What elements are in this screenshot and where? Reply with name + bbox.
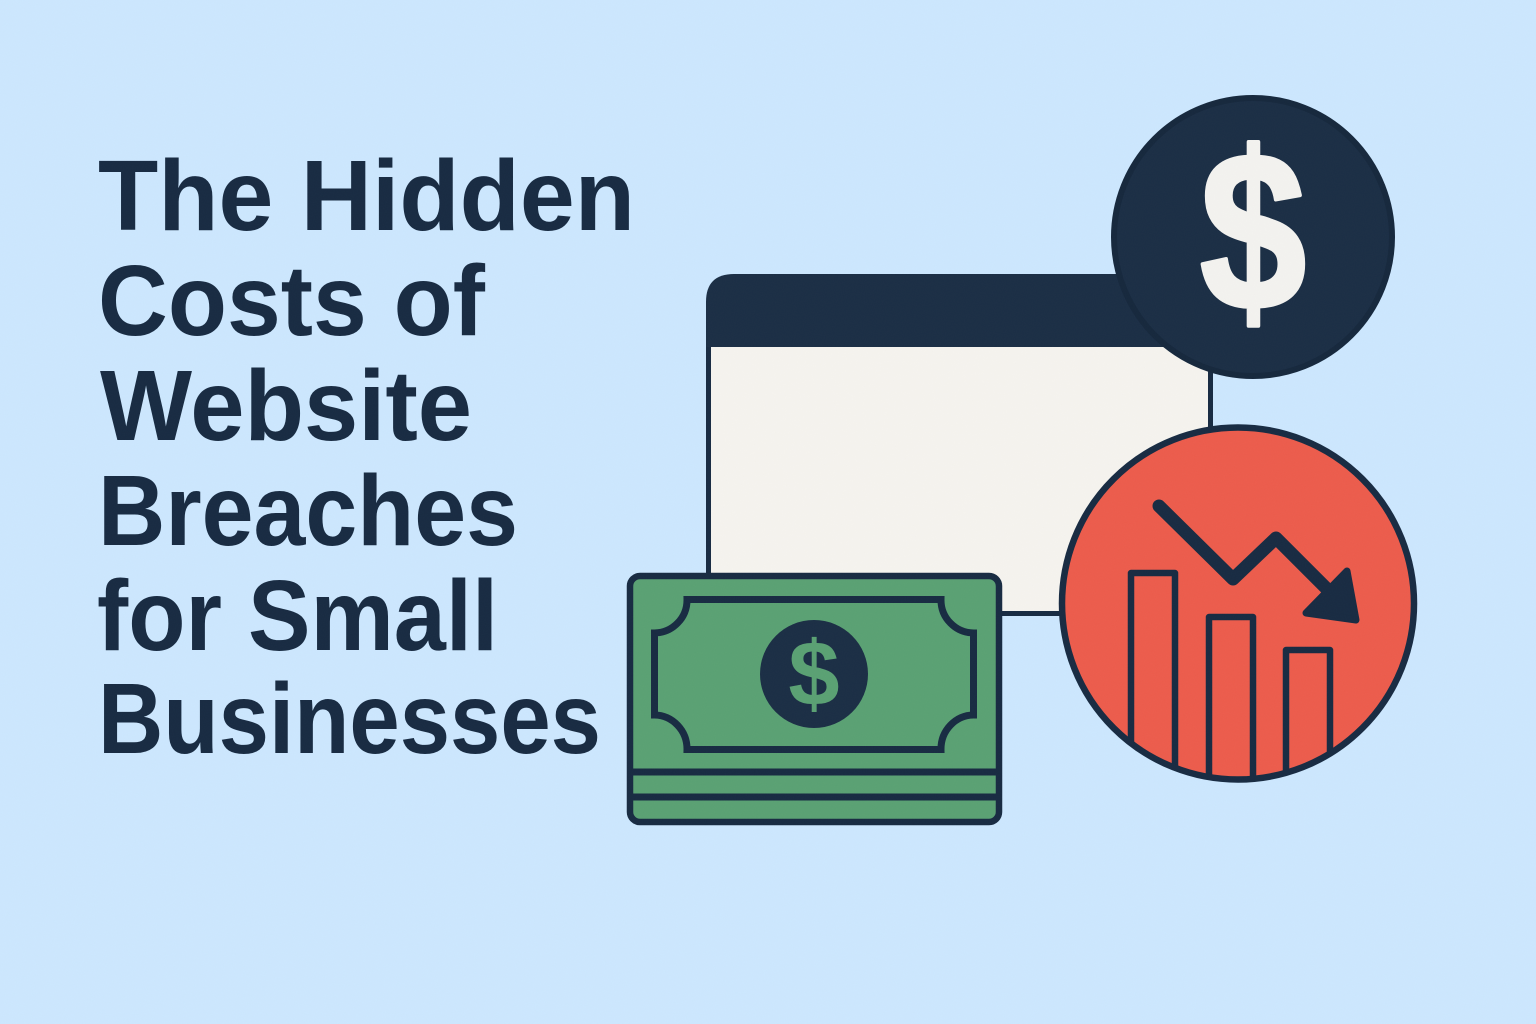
title: Businesses — [98, 663, 601, 775]
downward arrow — [1159, 506, 1356, 620]
red disc — [1062, 428, 1414, 780]
icon: navy coin with dollar sign: $ — [1200, 106, 1306, 357]
window body — [708, 340, 1210, 614]
title — [97, 140, 635, 775]
bill center coin: $ — [788, 623, 840, 725]
bill stack — [630, 576, 999, 822]
title: The Hidden — [98, 140, 635, 252]
browser window — [706, 274, 1213, 614]
icon: declining bar chart in red circle — [1058, 424, 1418, 783]
title: Website — [100, 350, 472, 462]
title: for Small — [97, 560, 498, 672]
title: Costs of — [98, 245, 486, 357]
stack edge lines — [630, 772, 999, 797]
icon: navy coin with dollar sign — [1114, 98, 1392, 376]
bill center coin — [760, 620, 868, 728]
bars — [1128, 570, 1334, 776]
window title bar — [706, 274, 1213, 347]
icon: stack of green banknotes — [630, 576, 999, 822]
title: Breaches — [98, 455, 518, 567]
disc outline — [1062, 428, 1414, 780]
bill inner frame — [654, 600, 974, 750]
